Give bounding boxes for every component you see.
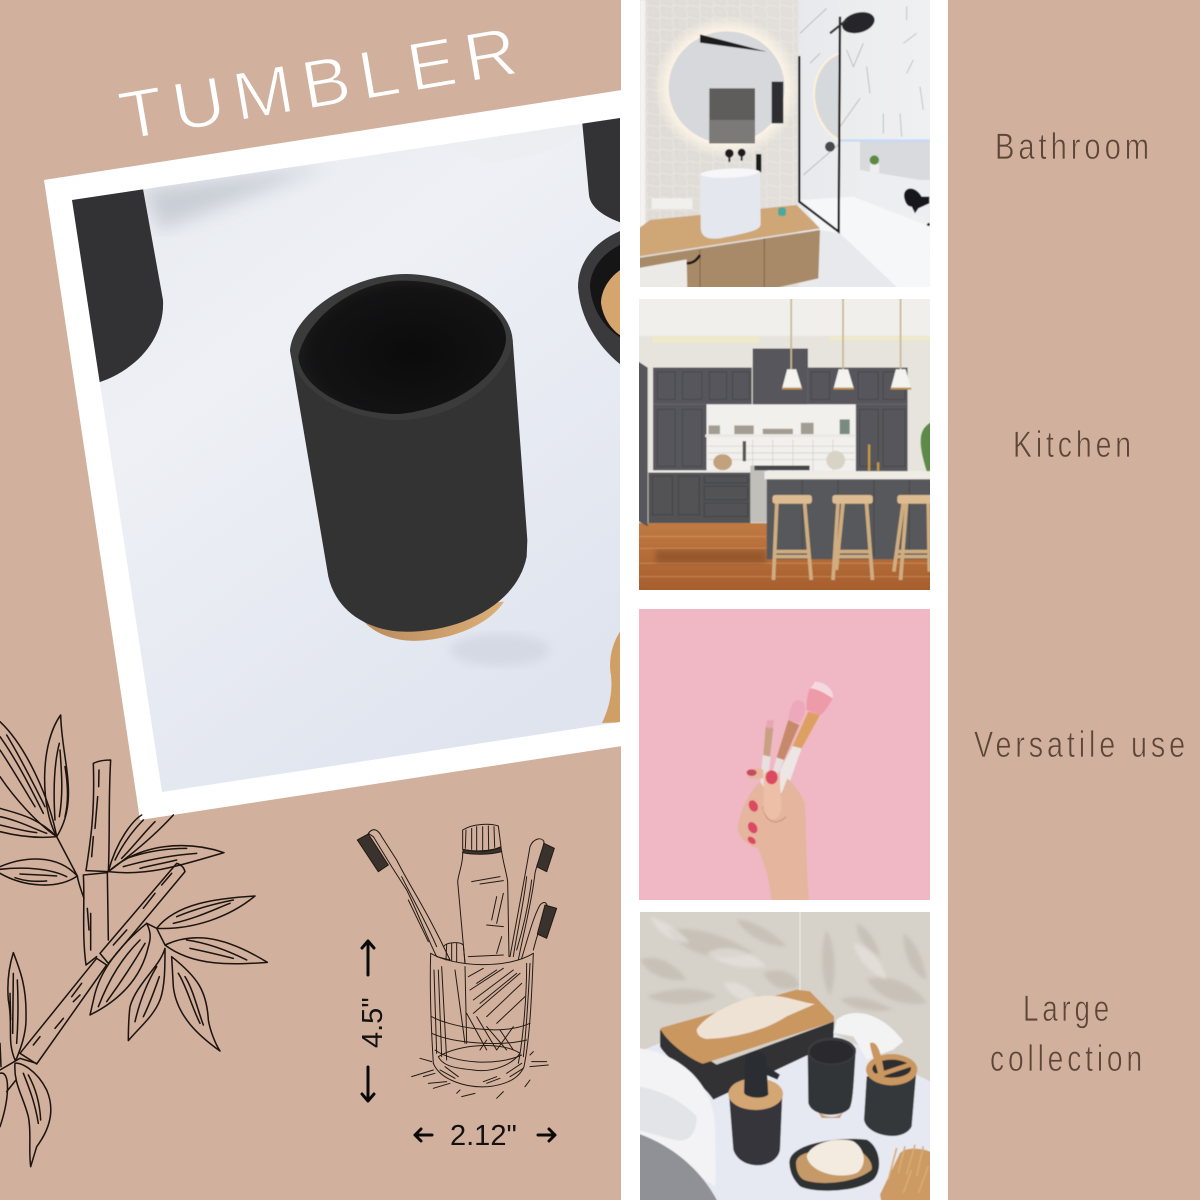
- photo frame: [44, 90, 622, 820]
- backsplash: [707, 404, 856, 471]
- diffuser: [778, 207, 786, 216]
- tumbler in zoomed coordinates: [290, 274, 527, 641]
- tissue box: [660, 990, 834, 1100]
- floor: [636, 523, 933, 593]
- table shading: [144, 166, 308, 232]
- arrow: right: [538, 1129, 555, 1141]
- tub: [637, 1048, 716, 1186]
- dimension: height: [357, 941, 389, 1101]
- wallpaper leaves: [640, 920, 927, 1011]
- toothpaste tube: [458, 824, 509, 963]
- shower screen: [799, 17, 840, 232]
- right toothbrush: [510, 839, 554, 960]
- second mirror: [814, 53, 840, 140]
- photo: versatile use (makeup brushes): [639, 609, 930, 900]
- grey towel: [637, 1133, 718, 1200]
- range hood: [753, 349, 808, 414]
- faucet: [725, 149, 761, 172]
- lower cabinets: [648, 472, 750, 523]
- shower head: [840, 9, 877, 37]
- photo: large collection: [640, 912, 930, 1200]
- caption: large collection: collection: [990, 1038, 1146, 1079]
- white towel: [833, 1013, 903, 1060]
- brushes: [759, 755, 771, 793]
- height label: 4.5": [357, 997, 389, 1048]
- wood counter: [637, 205, 820, 257]
- wall cabinets: [636, 349, 908, 526]
- soap dish: [789, 1139, 879, 1191]
- tumbler mouth: [298, 281, 506, 414]
- stools: [773, 503, 930, 580]
- arrow: up: [362, 941, 374, 975]
- nails: [746, 769, 778, 846]
- width label: 2.12": [450, 1120, 517, 1152]
- plant: [870, 164, 879, 173]
- tumbler rim: [290, 274, 513, 360]
- tumbler shadow: [454, 635, 546, 664]
- caption: kitchen: Kitchen: [1013, 424, 1135, 465]
- caption: large collection: [990, 988, 1146, 1079]
- marble veins: [800, 7, 923, 175]
- tumbler: [807, 1037, 856, 1118]
- soap dish: [578, 231, 620, 364]
- title: TUMBLER: [114, 11, 532, 155]
- white photo column: [621, 0, 948, 1200]
- top right tumbler: [582, 118, 620, 222]
- tumbler body: [290, 340, 527, 632]
- shelf niche: [860, 140, 930, 180]
- caption: bathroom: Bathroom: [995, 126, 1153, 167]
- wooden tray: [602, 632, 620, 723]
- shelf items: [709, 419, 850, 434]
- light switch: [652, 198, 692, 209]
- main photo: [60, 110, 630, 810]
- soap dispenser: [728, 1051, 783, 1165]
- illustration: toothbrushes in glass: [357, 824, 557, 1098]
- table: [637, 1033, 933, 1200]
- fingers: [747, 768, 763, 779]
- small toothbrush: [522, 903, 557, 958]
- photo: bathroom: [640, 0, 930, 287]
- mirror glow: [653, 16, 800, 159]
- left tumbler: [72, 189, 164, 382]
- left toothbrush: [357, 830, 450, 960]
- illustration: bamboo: [0, 715, 267, 1167]
- wooden base: [360, 602, 504, 641]
- towel: [637, 259, 687, 290]
- stove: [750, 466, 767, 522]
- panel: main tumbler photo frame: [44, 90, 630, 820]
- towel: [440, 118, 580, 163]
- basin: [701, 168, 761, 239]
- photo: kitchen: [639, 299, 930, 590]
- caption: large collection: Large: [1023, 988, 1113, 1029]
- bathtub: [800, 197, 930, 290]
- hair brush: [880, 1145, 933, 1200]
- gold faucet: [869, 444, 878, 471]
- dimension: width: [415, 1120, 555, 1152]
- pendant lights: [782, 296, 911, 389]
- tap: [904, 189, 929, 213]
- arrow: down: [362, 1067, 374, 1101]
- hand: [738, 778, 809, 903]
- plant: [921, 423, 933, 471]
- cabinet: [637, 230, 820, 290]
- toothbrush holder: [864, 1043, 917, 1136]
- round mirror: [669, 31, 785, 143]
- drinking glass: [412, 943, 548, 1098]
- arrow: left: [415, 1129, 432, 1141]
- island: [767, 479, 933, 559]
